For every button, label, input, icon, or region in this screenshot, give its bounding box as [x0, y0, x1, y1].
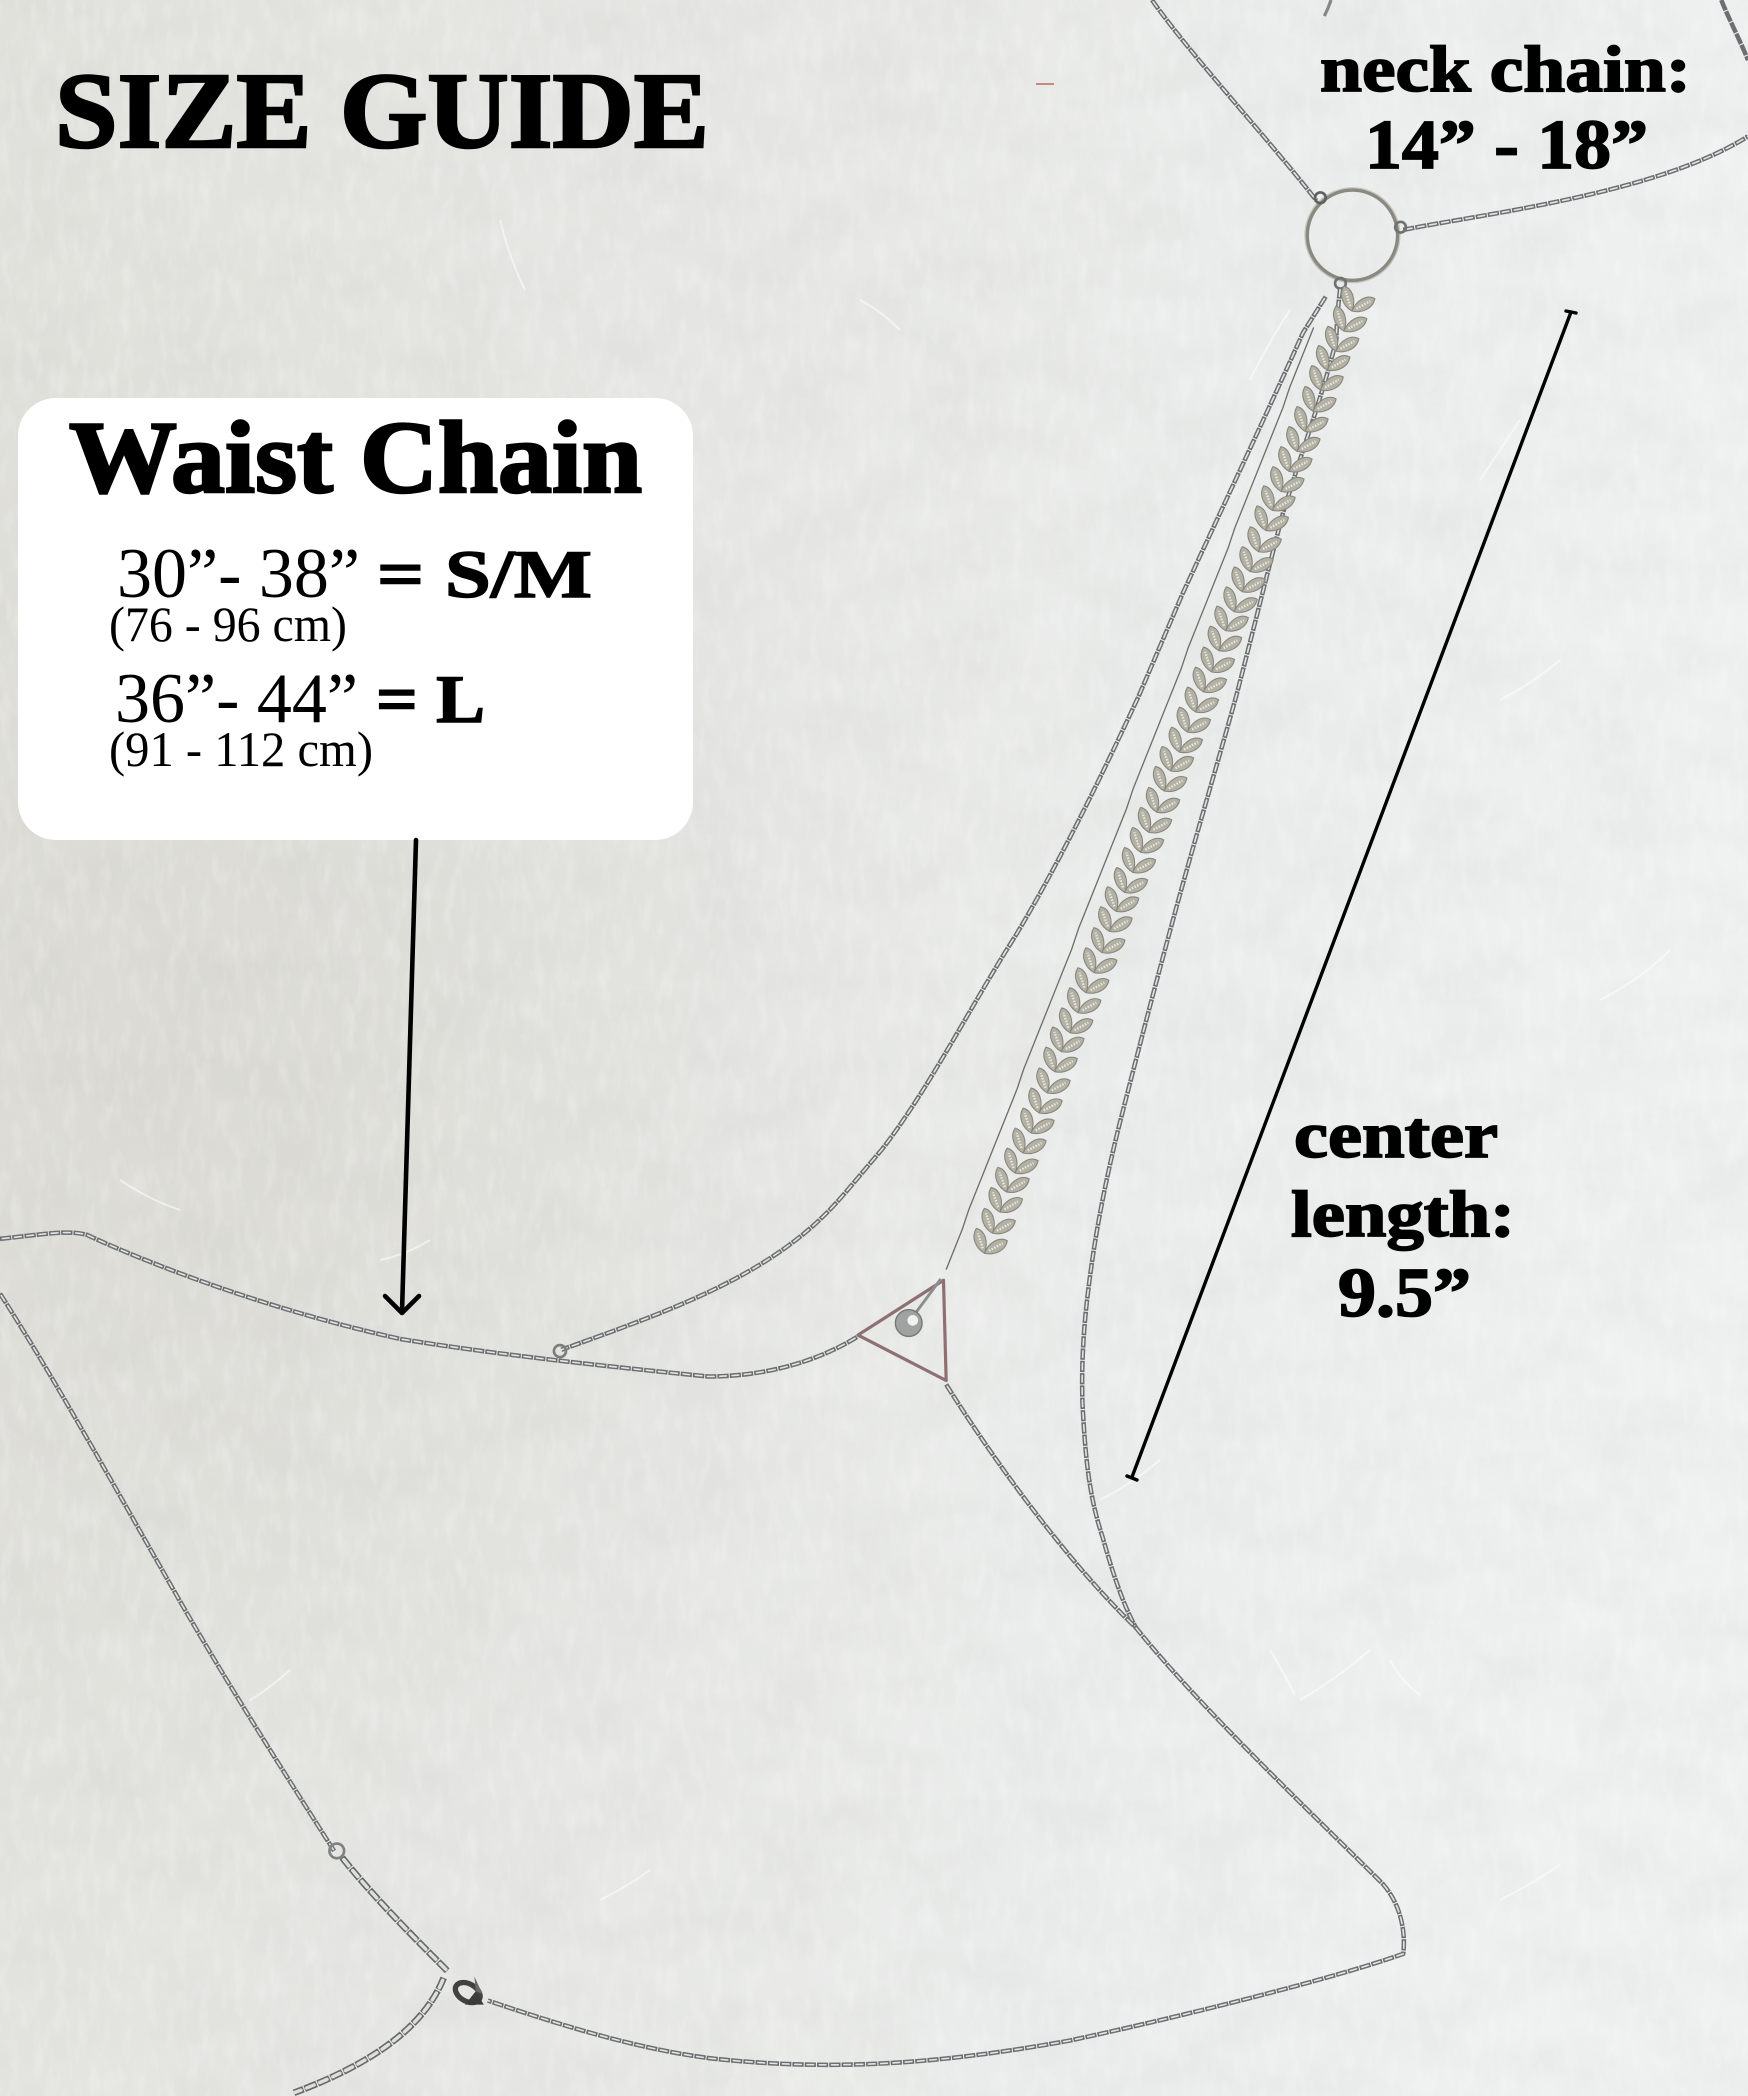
label: neck chain length: neck chain: — [1320, 33, 1691, 106]
heading: Waist Chain: Waist Chain — [69, 401, 642, 515]
triangle pendant with bead — [858, 1279, 946, 1381]
label: center length: center — [1294, 1099, 1498, 1172]
chain: right center strand — [1082, 287, 1340, 1628]
chain: thin strand to waist — [561, 297, 1326, 1350]
label: center length: length: — [1291, 1178, 1515, 1251]
chain: waist strand — [0, 1233, 858, 1376]
chain: right neck strand — [1324, 0, 1748, 230]
label: center length: 9.5” — [1338, 1255, 1471, 1332]
size row: S/M: = S/M — [377, 536, 592, 612]
size row: S/M: (76 - 96 cm) — [109, 596, 347, 652]
chain: lower body strand — [488, 1385, 1404, 2065]
panel: waist chain sizes — [18, 398, 693, 840]
label: neck chain length: 14” - 18” — [1365, 107, 1648, 184]
measurement line: center length — [1127, 311, 1576, 1480]
ring connector — [1305, 188, 1406, 289]
chain: left neck strand — [1152, 0, 1316, 200]
size row: L: 36”- 44” — [115, 660, 358, 738]
label: center length — [1291, 1099, 1515, 1332]
size row: S/M: 30”- 38” — [117, 535, 360, 613]
size row: L: (91 - 112 cm) — [109, 721, 373, 777]
label: neck chain length — [1320, 33, 1691, 184]
size row: S/M — [109, 535, 592, 652]
arrow: waist chain pointer — [385, 840, 419, 1313]
title: SIZE GUIDE: SIZE GUIDE — [55, 52, 709, 171]
chain: left lower strand with clasp — [0, 1294, 484, 2093]
size row: L — [109, 660, 485, 777]
chain: leaf center strand — [946, 327, 1314, 1270]
size row: L: = L — [376, 661, 485, 737]
